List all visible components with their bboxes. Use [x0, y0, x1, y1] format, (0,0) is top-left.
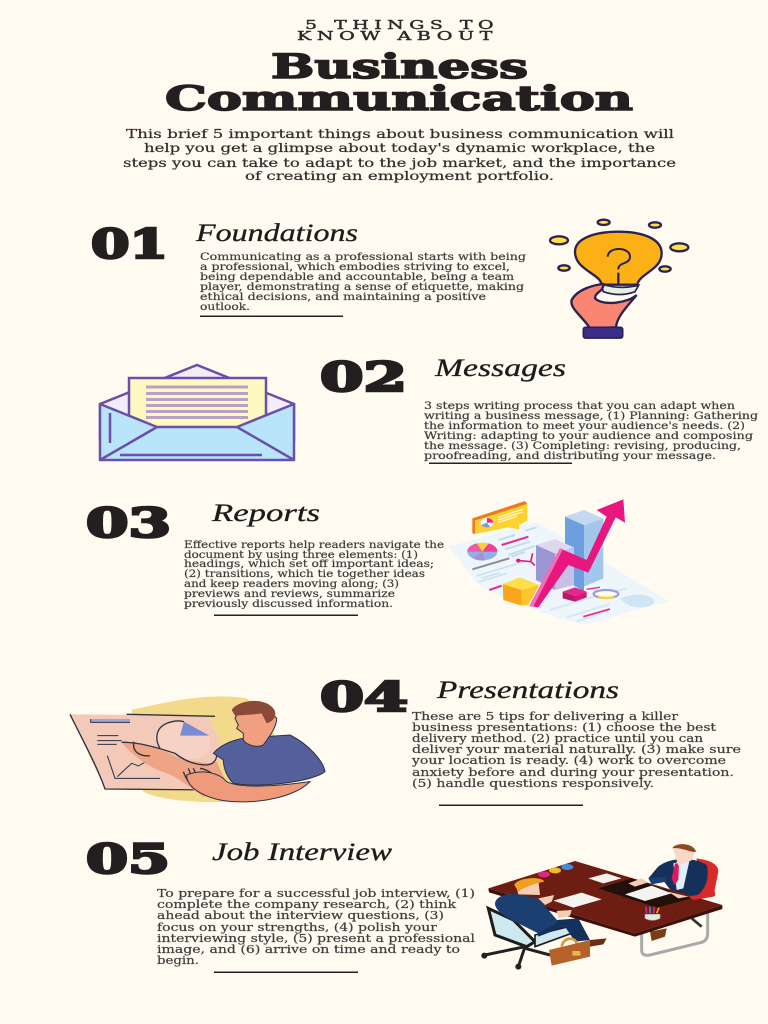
icon: light bulb in hand [550, 220, 688, 338]
body text: presentations: (5) handle questions responsively. [412, 777, 654, 790]
icon: open envelope [100, 365, 294, 460]
title: Communication [165, 79, 633, 119]
heading: messages: Messages [434, 355, 566, 382]
body text: presentations [411, 710, 741, 790]
heading: reports: Reports [211, 500, 320, 527]
body text: job interview: complete the company research, (2) think [157, 898, 456, 911]
body text: foundations [200, 252, 527, 313]
body text: messages [424, 401, 759, 462]
panel: 01 foundations [91, 220, 688, 338]
number 02: 02 [320, 354, 407, 401]
panel: 04 presentations [70, 674, 741, 806]
title [165, 47, 633, 119]
number 03: 03 [86, 500, 171, 547]
body text: foundations: a professional, which embodies striving to excel, [200, 262, 510, 273]
body text: reports: headings, which set off important ideas; [184, 559, 434, 570]
illustration: man presenting chart [70, 696, 325, 802]
intro text: This brief 5 important things about business communication will [126, 127, 674, 141]
body text: job interview: To prepare for a successful job interview, (1) [157, 887, 475, 900]
body text: messages: 3 steps writing process that you can adapt when [424, 401, 736, 412]
heading: foundations: Foundations [195, 220, 358, 247]
body text: messages: Writing: adapting to your audience and composing [424, 431, 754, 442]
body text: presentations: business presentations: (1) choose the best [412, 721, 717, 734]
body text: foundations: Communicating as a professional starts with being [200, 252, 527, 263]
body text: presentations: your location is ready. (4) work to overcome [411, 754, 726, 767]
panel: 03 reports [86, 499, 670, 625]
illustration: job interview at desk [481, 844, 722, 970]
body text: presentations: delivery method. (2) practice until you can [412, 732, 703, 745]
number 01: 01 [91, 221, 168, 268]
body text: job interview: focus on your strengths, (4) polish your [157, 921, 438, 934]
body text: foundations: player, demonstrating a sense of etiquette, making [200, 282, 525, 293]
body text: reports: document by using three elements: (1) [184, 550, 418, 561]
body text: reports: Effective reports help readers navigate the [184, 540, 444, 551]
body text: messages: the information to meet your audience's needs. (2) [424, 421, 745, 432]
title: Business [271, 47, 528, 87]
kicker: 5 things to know about: 5 THINGS TO [305, 18, 499, 32]
body text: presentations: anxiety before and during your presentation. [412, 766, 734, 779]
intro text [123, 127, 676, 183]
chart: isometric report illustration [448, 499, 670, 625]
body text: reports: and keep readers moving along; (3) [184, 579, 399, 590]
body text: reports: previously discussed information. [184, 599, 393, 610]
heading: presentations: Presentations [436, 677, 619, 704]
body text: job interview: begin. [157, 954, 199, 967]
body text: reports: (2) transitions, which tie together ideas [184, 569, 425, 580]
intro text: of creating an employment portfolio. [245, 169, 554, 183]
body text: presentations: deliver your material naturally. (3) make sure [412, 743, 741, 756]
number 05: 05 [86, 836, 170, 883]
body text: foundations: being dependable and accountable, being a team [200, 272, 515, 283]
body text: reports [184, 540, 444, 610]
body text: job interview [157, 887, 476, 967]
intro text: help you get a glimpse about today's dynamic workplace, the [144, 141, 655, 155]
panel: 05 job interview [86, 836, 722, 973]
number 04: 04 [320, 674, 408, 721]
body text: presentations: These are 5 tips for delivering a killer [412, 710, 679, 723]
intro text: steps you can take to adapt to the job market, and the importance [123, 156, 676, 170]
panel: 02 messages [100, 354, 759, 464]
kicker: 5 things to know about [297, 18, 499, 43]
kicker: 5 things to know about: KNOW ABOUT [297, 29, 498, 43]
heading: job interview: Job Interview [212, 839, 392, 866]
body text: reports: previews and reviews, summarize [184, 589, 395, 600]
body text: job interview: image, and (6) arrive on time and ready to [157, 943, 460, 956]
body text: foundations: outlook. [200, 302, 250, 313]
body text: messages: the message. (3) Completing: revising, producing, [424, 441, 741, 452]
body text: foundations: ethical decisions, and maintaining a positive [200, 292, 486, 303]
body text: messages: writing a business message, (1) Planning: Gathering [424, 411, 759, 422]
body text: job interview: interviewing style, (5) present a professional [157, 932, 476, 945]
body text: messages: proofreading, and distributing your message. [424, 451, 716, 462]
body text: job interview: ahead about the interview questions, (3) [157, 909, 444, 922]
